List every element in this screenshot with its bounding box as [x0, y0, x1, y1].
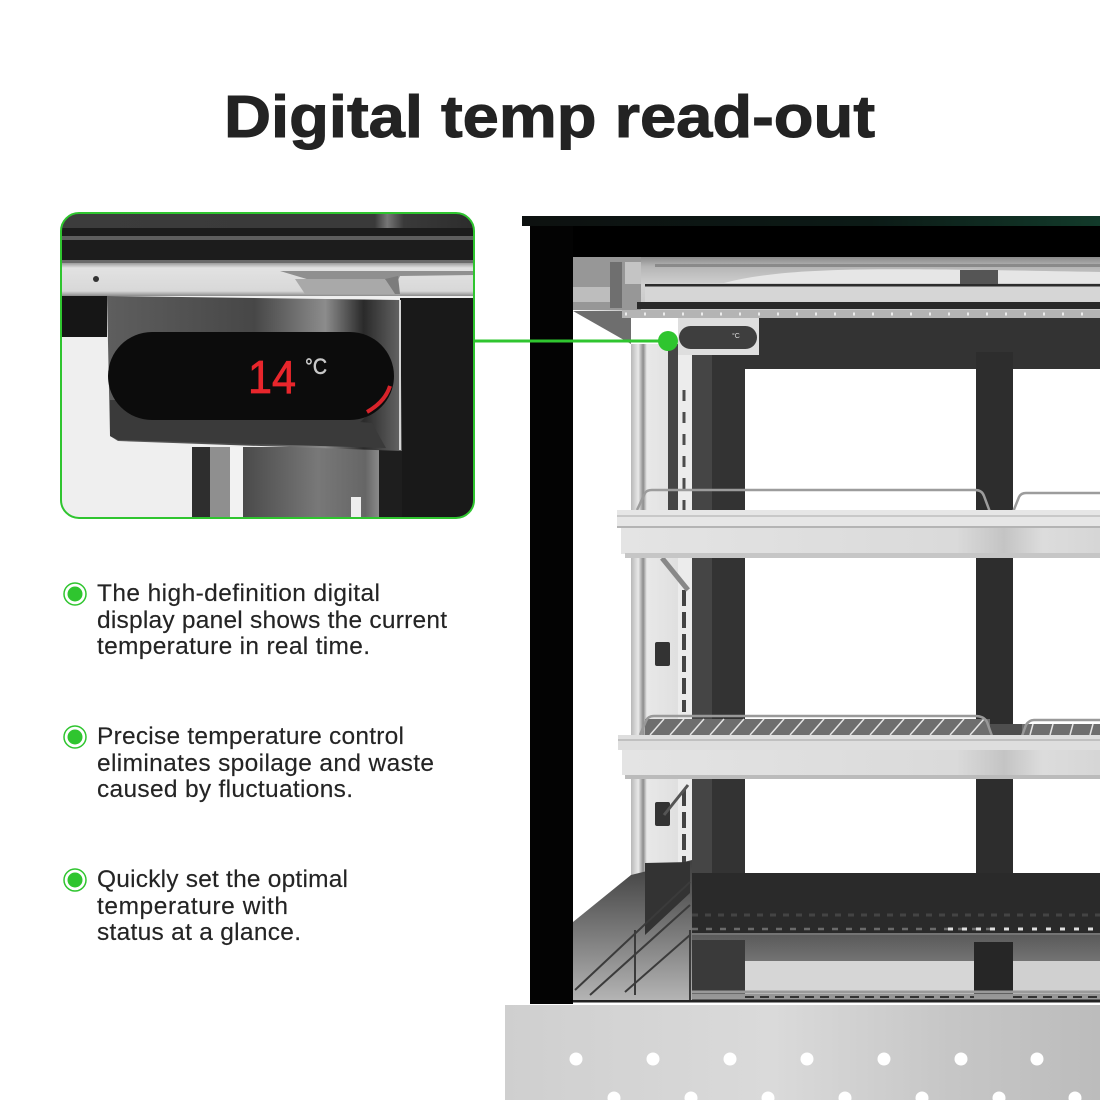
small temperature display unit: °C — [732, 332, 740, 340]
bullet icon 2 — [64, 726, 86, 748]
bullet text 3: temperature with — [97, 893, 288, 920]
inset metal bracket — [107, 296, 402, 451]
back window right — [1013, 369, 1100, 876]
bullet icon 3 — [64, 869, 86, 891]
title: Digital temp read-out — [224, 84, 875, 150]
bullet text 2: caused by fluctuations. — [97, 776, 353, 803]
case floor reflection — [573, 934, 1100, 1001]
bullet text 1: The high-definition digital — [97, 580, 380, 607]
bullet icon 1 — [64, 583, 86, 605]
bullet text 1: temperature in real time. — [97, 633, 370, 660]
bullet text 2: eliminates spoilage and waste — [97, 750, 434, 777]
bullet text 1 — [97, 580, 447, 660]
bullet text 2: Precise temperature control — [97, 723, 404, 750]
inset red reflection — [367, 386, 390, 412]
small temperature display unit — [678, 318, 759, 355]
lower glass dark reflection — [645, 862, 690, 935]
inset silver rail — [61, 263, 474, 296]
shelf upright — [655, 344, 692, 868]
panel: display case photo — [505, 216, 1100, 1100]
back window left — [745, 369, 976, 873]
base ventilation holes — [570, 1052, 1082, 1100]
bullet text 3: Quickly set the optimal — [97, 866, 348, 893]
frame header — [530, 226, 1100, 257]
back wall of case — [692, 318, 1100, 938]
inset right dark column — [400, 298, 474, 518]
LED strip — [622, 310, 1100, 318]
bullet 3 — [64, 866, 348, 946]
top bar — [522, 216, 1100, 226]
stainless base — [505, 1005, 1100, 1100]
inset temperature digits: 14 — [248, 351, 296, 403]
back wall side shading — [692, 355, 712, 875]
lower shelf — [618, 716, 1100, 779]
upper glass reflection — [573, 257, 1100, 344]
rear vent perforations lower row — [692, 928, 1000, 930]
bullet 1 — [64, 580, 447, 660]
bullet text 3 — [97, 866, 348, 946]
rear vent perforations upper row — [692, 914, 1100, 916]
bullet text 2 — [97, 723, 434, 803]
upper shelf — [617, 490, 1100, 558]
panel: zoomed inset of temperature display — [61, 213, 474, 518]
rear vent bright perforations — [948, 928, 1100, 930]
bullet text 3: status at a glance. — [97, 919, 301, 946]
frame left post — [530, 226, 573, 1004]
lower left glass streaks — [575, 882, 690, 1000]
inset top dark band — [61, 213, 474, 263]
bullet text 1: display panel shows the current — [97, 607, 447, 634]
inset bracket lower lip — [110, 400, 386, 448]
inset left dark block — [61, 296, 107, 337]
inset lower posts — [192, 447, 402, 518]
inset bracket edge — [399, 300, 401, 450]
lower left angled glass — [573, 860, 692, 1000]
side glass post — [631, 344, 692, 1000]
rear lower band — [692, 873, 1100, 933]
callout connector line and dot — [474, 331, 678, 351]
inset celsius unit: °C — [305, 354, 327, 379]
bullet 2 — [64, 723, 434, 803]
inset display pill — [108, 332, 394, 420]
rear column inner shade — [976, 352, 1013, 932]
inset green border — [61, 213, 474, 518]
